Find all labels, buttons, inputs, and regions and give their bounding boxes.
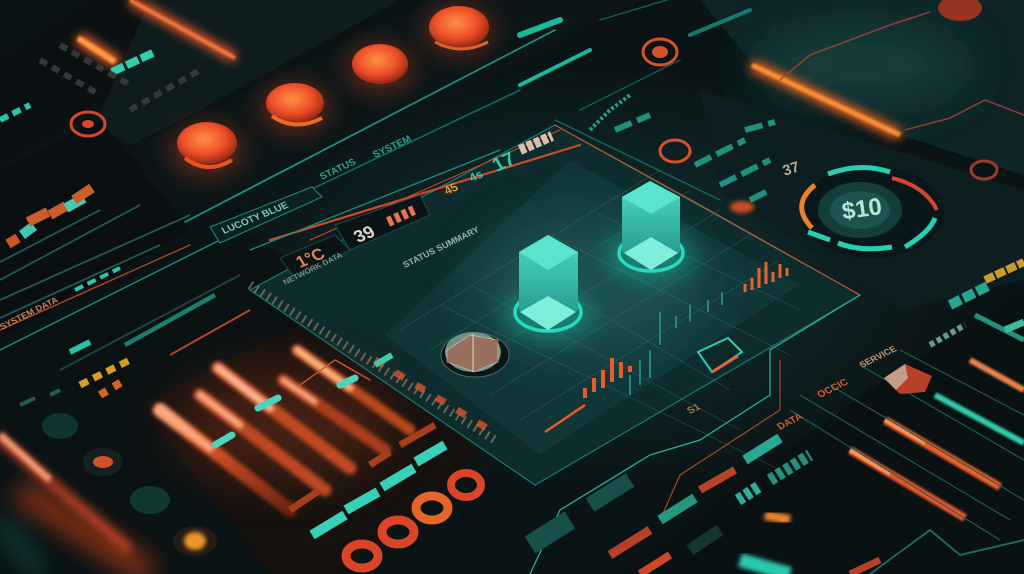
label: lucoty blue — [210, 187, 322, 243]
icon: red polyhedron — [884, 364, 932, 394]
top-left small pills — [40, 45, 200, 110]
readout 17: 17 — [488, 148, 520, 176]
orange streak: top right — [752, 65, 900, 135]
axis ticks left — [250, 285, 495, 440]
mini bars chart centre — [545, 358, 630, 432]
right edge modules — [930, 262, 1024, 345]
ring icon left — [71, 112, 105, 136]
panel: central dashboard — [250, 125, 860, 485]
gauge-side pills — [615, 115, 775, 200]
gauge number: 37 — [781, 158, 802, 180]
hex row: orange rings — [346, 473, 481, 568]
panel: orb strip — [130, 0, 680, 210]
left pills — [75, 268, 120, 290]
mini bars chart right — [660, 262, 787, 345]
header labels — [318, 134, 520, 198]
orb 2 — [261, 83, 329, 132]
arrow marker — [698, 338, 742, 372]
panel: top-right chart glow — [750, 27, 970, 103]
chart grid — [400, 170, 800, 470]
gauge — [800, 166, 944, 258]
ring icons right — [643, 0, 997, 179]
header labels: STATUS — [318, 157, 359, 183]
caption text: STATUS SUMMARY — [401, 225, 481, 270]
top-left glowing bars — [78, 38, 155, 72]
central teal ticks — [375, 355, 392, 365]
panel: top-right teal chart — [700, 0, 1024, 175]
bar chart: glowing orange bars — [160, 350, 410, 510]
label: lucoty blue: LUCOTY BLUE — [220, 200, 291, 237]
small text: bottom right: OCCIC — [815, 377, 851, 400]
orb 4 — [425, 6, 493, 54]
icon: cube 2 — [607, 181, 695, 280]
left column buttons — [20, 390, 217, 556]
small text: bottom right: DATA — [775, 412, 805, 432]
small text: bottom right: S1 — [685, 402, 703, 416]
readout 45: 45 — [441, 180, 461, 198]
orange streak: top left — [130, 0, 235, 58]
sparkline — [590, 95, 630, 130]
small orange marker — [730, 201, 754, 213]
readout pills — [520, 136, 552, 150]
left bar chart — [8, 188, 92, 244]
orb 1 — [171, 122, 243, 175]
readout: temperature: 1°C — [292, 244, 328, 271]
dashboard scene: NETWORK DATA — [281, 251, 344, 287]
module: lower-left controls — [60, 275, 250, 395]
small text: bottom right: SERVICE — [857, 344, 899, 370]
icon: sphere with hexagon — [441, 332, 509, 377]
axis ticks orange — [375, 360, 490, 430]
panel: left data module — [0, 120, 190, 340]
panel: lower-left chart module — [0, 230, 420, 520]
line chart: top right — [780, 12, 1024, 130]
teal sparkline — [630, 350, 650, 395]
hex row: teal bars — [312, 445, 445, 535]
panel: bottom-left glow field — [140, 325, 490, 574]
readout: temperature — [280, 235, 350, 278]
orb 3 — [347, 44, 413, 91]
readout: 39 — [335, 195, 430, 250]
glow behind bars: bottom left — [175, 370, 395, 480]
left small teal pills — [0, 105, 30, 120]
small text: bottom right — [685, 344, 899, 432]
orange streak: bottom-left corner — [0, 435, 150, 574]
panel: bottom-right module — [620, 290, 1024, 574]
left list lines — [0, 205, 190, 318]
header labels: 4s — [466, 167, 486, 185]
hex row: orange bars — [290, 425, 435, 510]
panel: top-left dark module — [0, 0, 240, 165]
icon: cube 1 — [504, 235, 592, 339]
panel: gauge module — [700, 90, 1024, 310]
readout: 39: 39 — [350, 222, 379, 246]
gauge value: $10 — [840, 193, 884, 225]
module: bottom-center pills — [530, 438, 1024, 574]
bottom-right bars — [790, 350, 1024, 540]
header labels: SYSTEM — [371, 134, 414, 161]
panel: top strip — [95, 0, 400, 145]
